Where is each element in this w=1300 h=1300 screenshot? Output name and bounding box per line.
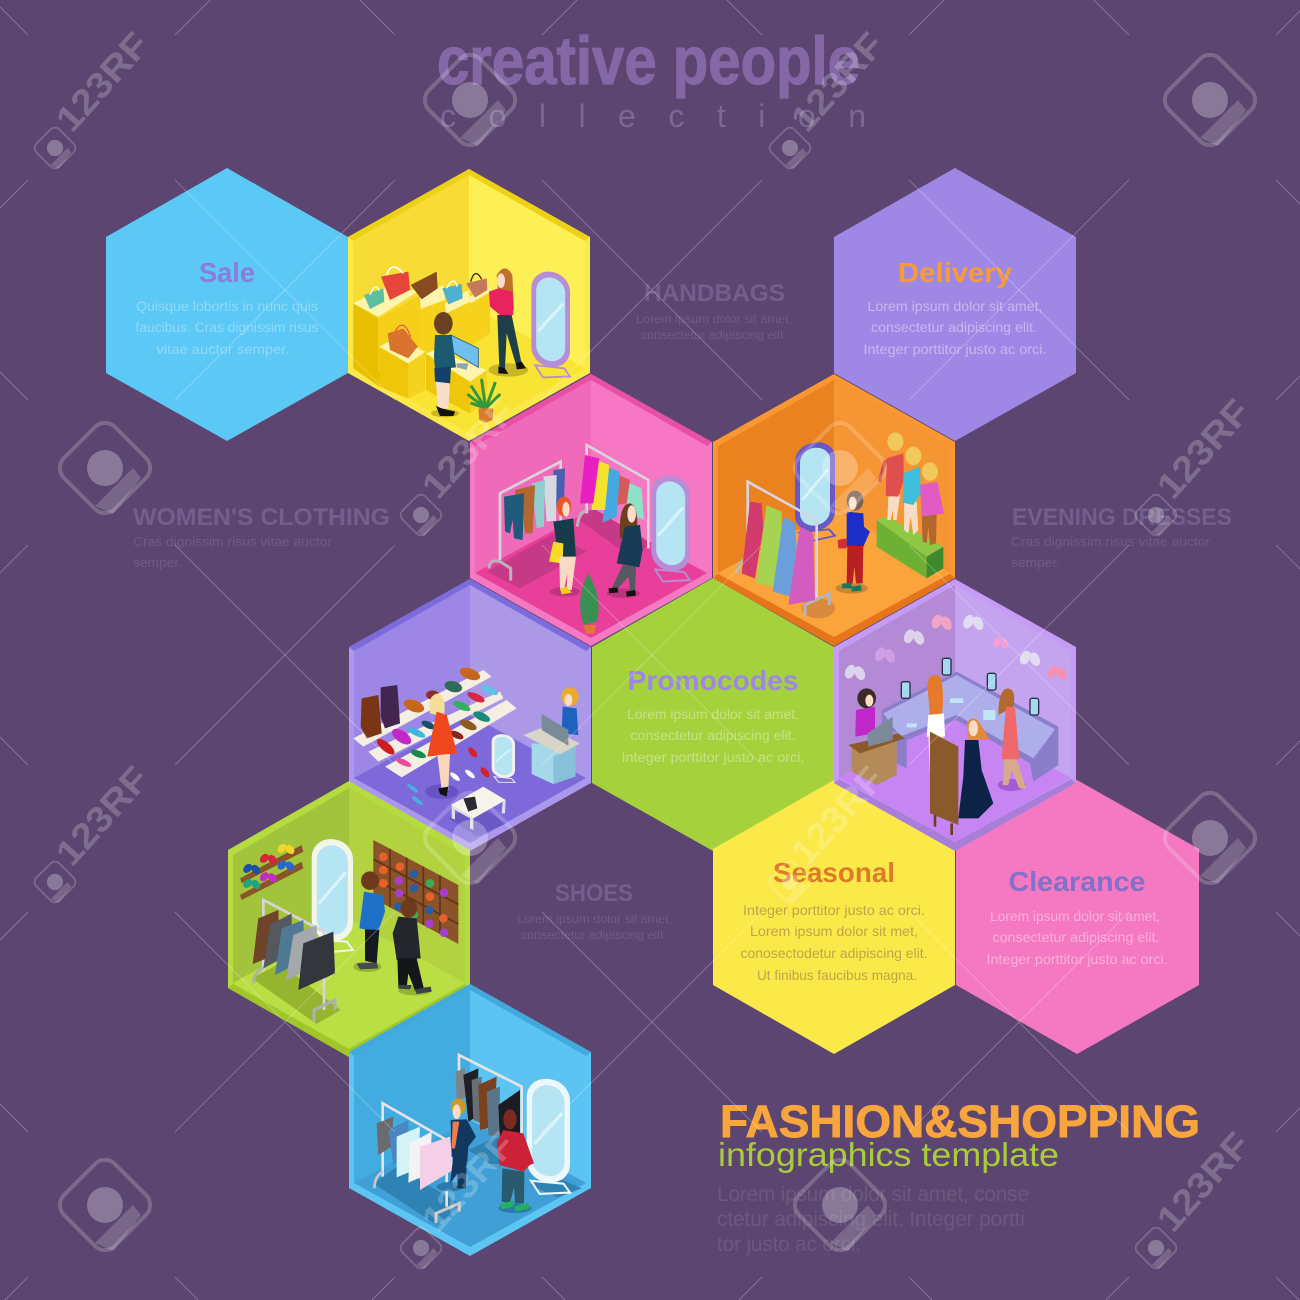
shoe shelves (353, 670, 517, 777)
heading: delivery: Delivery (898, 257, 1012, 288)
green display platform (877, 517, 943, 578)
room: shoes (purple) (349, 579, 591, 851)
person: woman in navy coat (607, 503, 643, 598)
wall butterflies (843, 613, 1069, 682)
text: delivery body: Integer porttitor justo ac orci. (864, 341, 1046, 357)
logo: creative people collection (437, 23, 866, 134)
text: delivery body (864, 298, 1046, 357)
text: promocodes body: Lorem ipsum dolor sit amet, (627, 706, 799, 722)
text: sale body: vitae auctor semper. (156, 341, 290, 357)
icons: handbags (364, 267, 487, 358)
room: men's clothing (blue) (349, 984, 591, 1256)
fitting screen (930, 732, 958, 835)
icon: mirror (531, 270, 570, 380)
label: women's clothing: WOMEN'S CLOTHING (133, 504, 390, 531)
logo: creative people collection: creative people (437, 23, 860, 99)
text: promocodes body: consectetur adipiscing elit. (630, 727, 796, 743)
clothes rack: trousers (456, 1055, 522, 1142)
icon: mirror (492, 733, 515, 784)
cash desk with clerk (523, 687, 580, 784)
clothes rack: shirts (374, 1103, 459, 1223)
room: women's clothing (pink) (470, 374, 712, 646)
text: seasonal body: Ut finibus faucibus magna. (757, 967, 917, 983)
clothes rack: trousers (489, 462, 565, 581)
watermark: stamps: 123RF (782, 758, 892, 873)
text: clearance body: Integer porttitor justo ac orci. (986, 951, 1168, 967)
person: woman in navy gown (958, 718, 993, 818)
heading: seasonal: Seasonal (773, 857, 895, 888)
boots (361, 685, 400, 738)
label: shoes: Lorem ipsum dolor sit amet, (517, 912, 672, 926)
person: man in blue jacket (353, 871, 385, 972)
rugs (373, 1137, 582, 1225)
shoes on shelves (374, 665, 499, 769)
person: man in black suit (393, 899, 432, 995)
text: delivery body: consectetur adipiscing elit. (871, 319, 1037, 335)
watermark: stamps: 123RF (782, 24, 892, 139)
text: clearance body: consectetur adipiscing elit. (992, 929, 1160, 945)
rugs (487, 508, 652, 588)
heading: clearance: Clearance (1008, 866, 1146, 897)
watermark: stamps: 123RF (47, 758, 157, 873)
label: women's clothing (133, 504, 390, 570)
shelves and cash desk (353, 285, 491, 413)
panel: delivery hexagon (834, 168, 1076, 441)
jewelry counter (882, 658, 1058, 782)
subtitle: infographics template (718, 1136, 1059, 1173)
label: handbags: Lorem ipsum dolor sit amet, (636, 312, 792, 326)
label: shoes: consectetur adipiscing elit. (521, 928, 667, 942)
label: women's clothing: Cras dignissim risus vitae auctor (133, 534, 333, 549)
label: shoes: SHOES (555, 880, 633, 907)
icon: mirror (795, 440, 835, 544)
title: fashion and shopping: FASHION&SHOPPING (720, 1096, 1200, 1147)
watermark: stamps: 123RF (1148, 1124, 1258, 1239)
person: man in red sweater (497, 1109, 534, 1213)
text: seasonal body: Lorem ipsum dolor sit met, (750, 923, 918, 939)
text: template description: Lorem ipsum dolor sit amet, conse (717, 1183, 1029, 1206)
watermark: stamps: 123RF (1148, 391, 1258, 506)
icon: tall plant (580, 573, 599, 633)
text: seasonal body: conosectodetur adipiscing elit. (740, 945, 928, 961)
person: woman in white dress (927, 675, 945, 777)
icon: potted plant (468, 380, 499, 423)
label: women's clothing: semper. (133, 555, 182, 570)
table with bag (448, 787, 507, 837)
clothes rack: dresses (737, 482, 835, 618)
panel: seasonal hexagon (713, 780, 955, 1054)
room: evening dresses (orange) (713, 374, 955, 646)
person: man in navy jacket (437, 1099, 476, 1191)
label: handbags: consectetur adipiscing elit. (641, 328, 787, 342)
hat display wall (373, 840, 458, 944)
text: sale body (136, 298, 318, 357)
watermark: stamps: 123RF (47, 24, 157, 139)
text: delivery body: Lorem ipsum dolor sit amet, (868, 298, 1042, 314)
text: sale body: Quisque lobortis in nunc quis (136, 298, 318, 314)
label: evening dresses: semper. (1011, 555, 1060, 570)
title: fashion and shopping (718, 1096, 1200, 1173)
bow tie shelves (240, 843, 303, 900)
cash desk with clerk (848, 688, 905, 785)
person: customer in blue top (836, 491, 870, 594)
heading: promocodes: Promocodes (628, 665, 798, 696)
person: woman in coral dress (998, 688, 1026, 791)
text: sale body: faucibus. Cras dignissim risus (136, 319, 318, 335)
clothes rack: jackets (252, 900, 341, 1024)
shoes on floor (406, 746, 491, 806)
text: seasonal body: Integer porttitor justo ac orci. (743, 902, 925, 918)
person: woman at monitor (431, 312, 478, 417)
mannequins (879, 432, 944, 545)
room: men's suits (green) (228, 781, 470, 1057)
room: jewelry (lilac) (834, 579, 1076, 851)
text: template description: ctetur adipiscing elit. Integer portti (717, 1208, 1025, 1231)
label: handbags: HANDBAGS (644, 280, 785, 307)
icon: mirror (312, 838, 353, 954)
label: shoes (517, 880, 672, 942)
text: template description: tor justo ac orci. (717, 1233, 861, 1256)
label: handbags (636, 280, 792, 342)
person: woman in pink jacket (488, 268, 528, 377)
watermark: stamps: 123RF (413, 1124, 523, 1239)
text: clearance body (986, 908, 1168, 967)
icon: mirror (651, 474, 690, 584)
text: template description (717, 1183, 1029, 1256)
watermark: stamps: 123RF (413, 391, 523, 506)
panel: promocodes hexagon (592, 578, 834, 851)
room: handbags (yellow) (348, 169, 590, 441)
text: promocodes body: Integer porttitor justo ac orci. (622, 749, 804, 765)
label: evening dresses (1011, 504, 1232, 570)
heading: sale: Sale (199, 257, 255, 288)
panel: clearance hexagon (956, 780, 1199, 1054)
person: woman with yellow bag (549, 497, 580, 596)
logo: creative people collection: collection (440, 98, 866, 134)
text: seasonal body (740, 902, 928, 983)
clothes rack: dresses (577, 445, 648, 548)
label: evening dresses: Cras dignissim risus vitae auctor (1011, 534, 1211, 549)
person: woman in red dress (425, 693, 458, 799)
panel: sale hexagon (106, 168, 348, 441)
text: promocodes body (622, 706, 804, 765)
text: clearance body: Lorem ipsum dolor sit amet, (990, 908, 1160, 924)
label: evening dresses: EVENING DRESSES (1012, 504, 1232, 531)
icon: mirror (527, 1077, 570, 1197)
